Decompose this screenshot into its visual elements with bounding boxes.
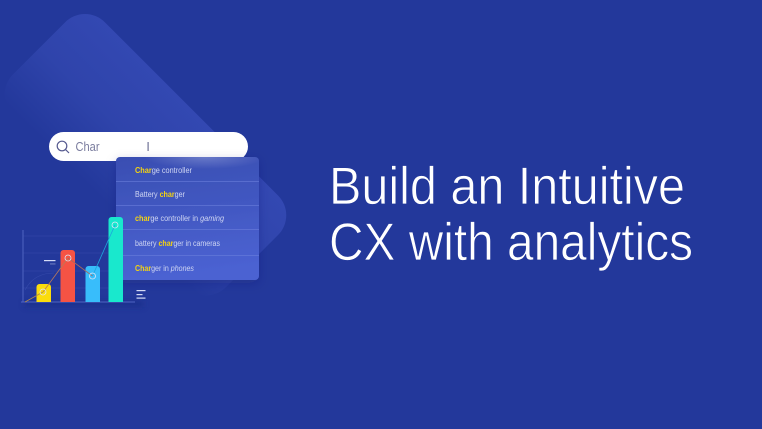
text cursor bbox=[148, 142, 149, 151]
small label marks right bbox=[136, 290, 146, 299]
icon: magnifier bbox=[57, 141, 69, 153]
teal bar bbox=[108, 217, 123, 302]
bar chart bbox=[21, 217, 146, 307]
title bbox=[329, 157, 693, 272]
suggestion 1: Charge controller bbox=[135, 166, 192, 175]
trend line bbox=[25, 225, 115, 302]
decorative rotated diamond bbox=[0, 2, 298, 307]
panel: suggestions dropdown bbox=[116, 145, 265, 280]
yellow bar bbox=[36, 284, 51, 302]
suggestion 4: battery charger in cameras bbox=[135, 239, 220, 248]
suggestion 3: charge controller in gaming bbox=[135, 214, 225, 223]
search bar bbox=[49, 132, 248, 161]
chart shadow bbox=[24, 301, 144, 307]
suggestion 5: Charger in phones bbox=[135, 264, 194, 273]
data points bbox=[40, 222, 118, 295]
suggestion 2: Battery charger bbox=[135, 190, 185, 199]
title: CX with analytics bbox=[329, 213, 693, 272]
title: Build an Intuitive bbox=[329, 157, 685, 216]
axes bbox=[21, 230, 135, 302]
small label marks left bbox=[44, 260, 56, 264]
search text: Char bbox=[76, 140, 100, 154]
red bar bbox=[60, 250, 75, 302]
blue bar bbox=[86, 266, 100, 302]
